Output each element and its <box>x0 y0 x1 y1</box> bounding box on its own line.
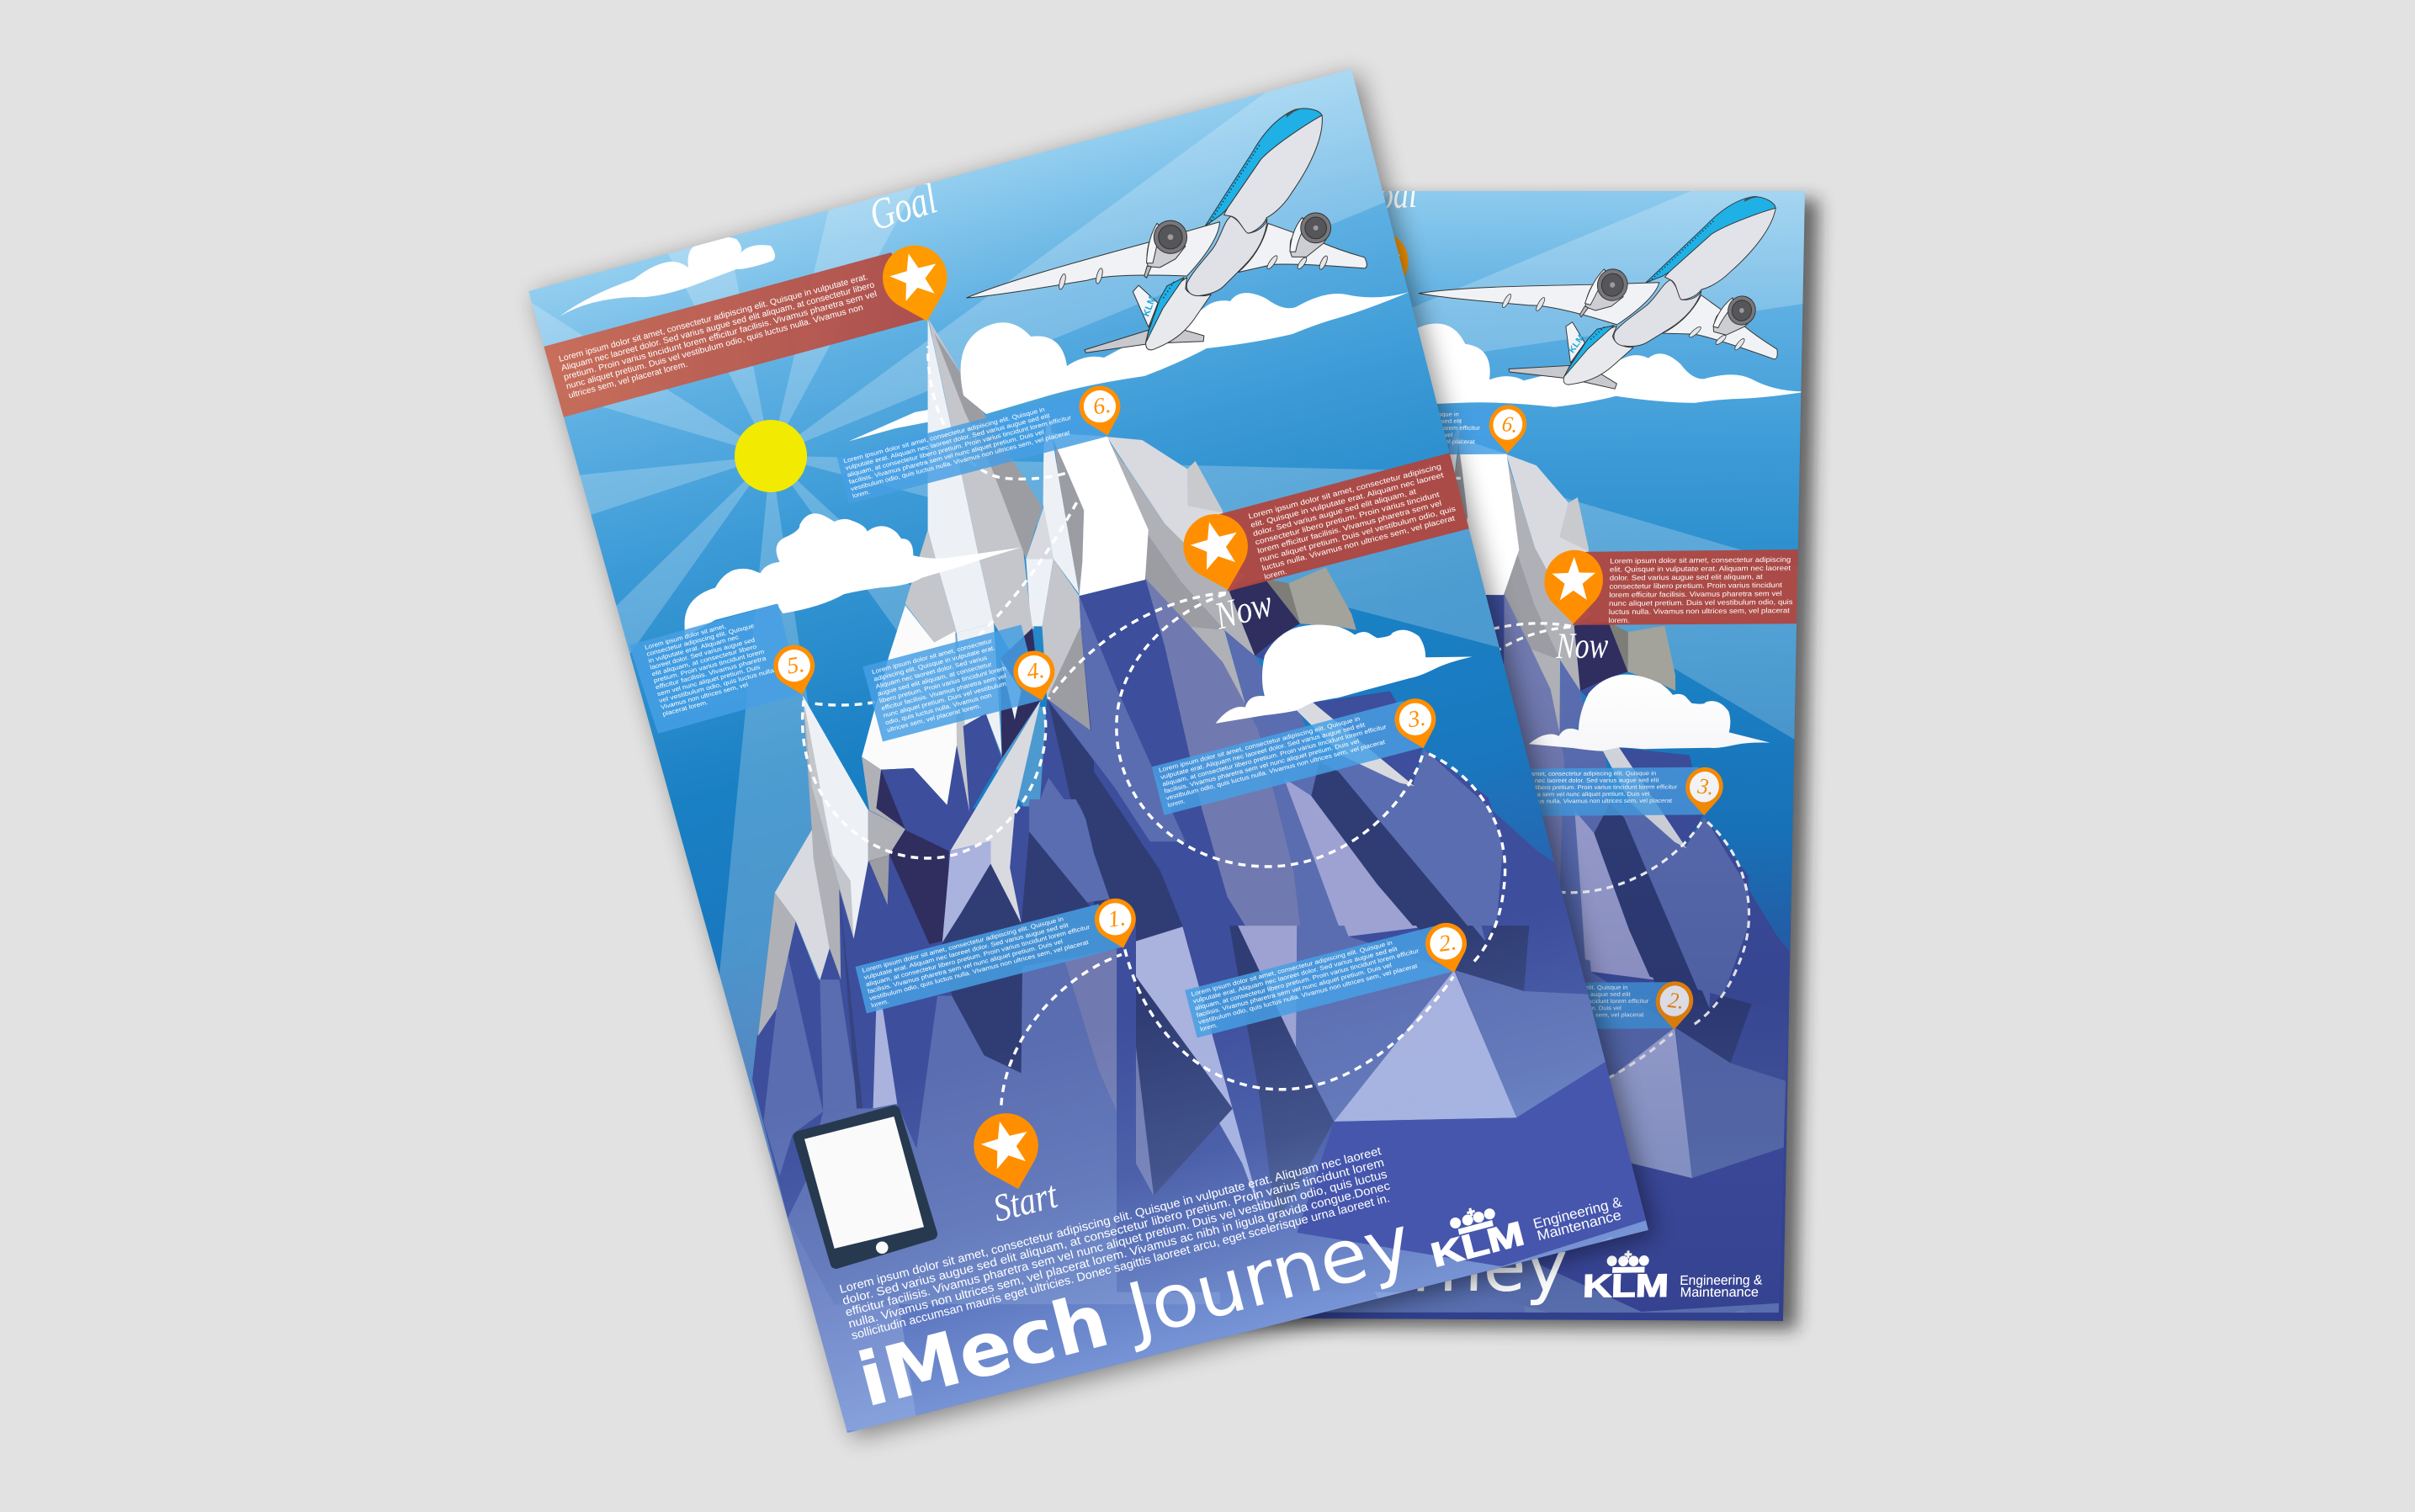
text panel four: efficitur facilisis. Vivamus pharetra sem vel <box>880 671 1007 712</box>
pin: five: 5. <box>785 650 806 679</box>
pin: four: 4. <box>1025 656 1046 684</box>
text panel two: vestibulum odio, quis luctus nulla. Vivamus non ultrices sem, vel placerat <box>1197 962 1418 1026</box>
central massif under Now <box>1094 437 1538 926</box>
plane <box>967 109 1367 353</box>
plane blue top <box>1206 109 1322 225</box>
text panel four: odio, quis luctus nulla. Vivamus non <box>884 692 992 726</box>
text panel two: lorem. <box>1199 1021 1218 1033</box>
bottom right blue facet <box>1297 1060 1648 1266</box>
text panel two: Lorem ipsum dolor sit amet, consectetur adipiscing elit. Quisque in <box>1190 938 1393 998</box>
text panel four: Aliquam nec laoreet dolor. Sed varius <box>875 654 988 690</box>
text panel five: efficitur facilisis. Vivamus pharetra <box>655 654 768 691</box>
text panel two: aliquam, at consectetur libero pretium. Proin varius tincidunt lorem efficitur <box>1194 947 1420 1012</box>
route: dashed journey paths <box>803 346 1505 1106</box>
pin: six <box>1079 386 1120 435</box>
plane windows <box>1208 146 1260 225</box>
goal text panel <box>544 252 926 417</box>
front poster <box>522 67 1778 1433</box>
lower right massif <box>1117 841 1641 1292</box>
plane right engine <box>1290 213 1331 257</box>
logo division name: Engineering & <box>1531 1194 1623 1232</box>
text panel four: nunc aliquet pretium. Duis vel vestibulum <box>883 680 1007 719</box>
peak: five <box>803 696 868 939</box>
cloud: top left <box>560 236 775 316</box>
plane cockpit <box>1287 109 1302 118</box>
mountain base <box>1040 592 1190 804</box>
pin: two: 2. <box>1437 928 1458 957</box>
text panel two <box>1185 926 1454 1037</box>
goal text panel: nunc aliquet pretium. Duis vel vestibulum odio, quis luctus nulla. Vivamus non <box>565 303 864 391</box>
text panel five: sem vel nunc aliquet pretium. Duis <box>656 663 762 698</box>
body text: Lorem ipsum dolor sit amet, consectetur adipiscing elit. Quisque in vulputate erat. Aliquam nec laoreet <box>838 1143 1383 1296</box>
text panel one <box>855 904 1123 1013</box>
plane right wing <box>1238 223 1367 273</box>
text panel five: Vivamus non ultrices sem, vel <box>660 681 749 711</box>
now text panel: elit. Quisque in vulputate erat. Aliquam nec laoreet <box>1250 470 1445 529</box>
pin: five <box>773 645 815 695</box>
now text panel: luctus nulla. Vivamus non ultrices sem, vel placerat <box>1261 513 1457 572</box>
text panel one: lorem. <box>870 997 889 1009</box>
lower left massif <box>752 799 1220 1304</box>
body text: sollicitudin accumsan mauris eget ultricies. Donec sagittis laoreet arcu, eget scelerisque urna laoreet in. <box>850 1191 1391 1342</box>
peak: goal spire <box>928 319 994 633</box>
plane tail logo: KLM <box>1141 295 1158 318</box>
text panel five: in vulputate erat. Aliquam nec <box>647 633 740 665</box>
text panel one: vulputate erat. Aliquam nec laoreet dolor. Sed varius augue sed elit <box>863 921 1070 981</box>
plane flap fairings <box>1058 254 1329 290</box>
text panel three: aliquam, at consectetur libero pretium. Proin varius tincidunt lorem efficitur <box>1161 723 1388 788</box>
text panel three: facilisis. Vivamus pharetra sem vel nunc aliquet pretium. Duis vel <box>1163 737 1361 795</box>
text panel five: pretium. Proin varius tincidunt lorem <box>653 648 765 684</box>
text panel four: libero pretium. Proin varius tincidunt lorem <box>878 664 1007 705</box>
text panel one: aliquam, at consectetur libero pretium. Proin varius tincidunt lorem efficitur <box>865 923 1091 988</box>
plane left wing <box>967 222 1219 298</box>
body text: dolor. Sed varius augue sed elit aliquam, at consectetur libero pretium. Proin varius tincidunt lorem <box>841 1155 1385 1308</box>
text panel five: consectetur adipiscing elit. Quisque <box>645 622 755 658</box>
text panel one: Lorem ipsum dolor sit amet, consectetur adipiscing elit. Quisque in <box>862 915 1064 974</box>
body text: efficitur facilisis. Vivamus pharetra sem vel nunc aliquet pretium. Duis vel vestibulum odio, quis luctus <box>844 1167 1388 1318</box>
pin: two <box>1425 923 1467 973</box>
text panel six: facilisis. Vivamus pharetra sem vel nunc aliquet pretium. Duis vel <box>848 428 1045 485</box>
peak: six <box>1026 507 1054 559</box>
back poster <box>1299 191 1805 1321</box>
now text panel: dolor. Sed varius augue sed elit aliquam, at <box>1252 487 1418 538</box>
front poster shadow <box>535 74 1655 1438</box>
text panel five: placerat lorem. <box>661 698 709 718</box>
now text panel: lorem efficitur facilisis. Vivamus pharetra sem vel <box>1256 499 1442 555</box>
label: Goal: Goal <box>864 175 942 240</box>
bottom light fade <box>528 69 1648 1433</box>
label: Start: Start <box>989 1173 1062 1230</box>
text panel one: vestibulum odio, quis luctus nulla. Vivamus non ultrices sem, vel placerat <box>868 938 1089 1002</box>
logo wordmark: KLM <box>1427 1215 1528 1275</box>
pin: three <box>1394 698 1436 748</box>
plane left engine <box>1144 220 1187 278</box>
goal text panel: Aliquam nec laoreet dolor. Sed varius augue sed elit aliquam, at consectetur libero <box>560 280 876 374</box>
text panel four: augue sed elit aliquam, at consectetur <box>877 660 993 698</box>
pin: one <box>1095 899 1136 948</box>
cloud: main under plane <box>961 292 1409 414</box>
title: iMech Journey <box>849 1198 1420 1424</box>
snow peaks <box>758 319 1186 1036</box>
now text panel: consectetur libero pretium. Proin varius tincidunt <box>1255 490 1441 546</box>
text panel five: elit aliquam, at consectetur libero <box>651 643 757 678</box>
pin: now star <box>1183 514 1248 590</box>
label: Now: Now <box>1210 581 1277 638</box>
text panel five <box>629 604 800 734</box>
now text panel: nunc aliquet pretium. Duis vel vestibulum odio, quis <box>1259 504 1457 564</box>
text panel six: aliquam, at consectetur libero pretium. Proin varius tincidunt lorem efficitur <box>847 413 1073 479</box>
text panel six: vestibulum odio, quis luctus nulla. Vivamus non ultrices sem, vel placerat <box>850 429 1070 493</box>
pin: one: 1. <box>1107 904 1127 932</box>
sun rays <box>522 67 1778 1430</box>
cloud: at Now <box>1216 624 1473 724</box>
plane rear fuselage <box>1146 278 1211 350</box>
mountains <box>752 319 1641 1304</box>
text panel four: ultrices sem, vel placerat lorem. <box>886 702 981 734</box>
back poster shadow <box>994 199 1818 1329</box>
text panel three: vulputate erat. Aliquam nec laoreet dolor. Sed varius augue sed elit <box>1160 721 1366 781</box>
text panel four: adipiscing elit. Quisque in vulputate erat. <box>873 644 996 683</box>
cloud: middle left <box>685 513 1022 638</box>
text panel four <box>862 625 1041 741</box>
plane centre section <box>1186 216 1267 296</box>
pin: six: 6. <box>1091 391 1112 419</box>
text panel five: Lorem ipsum dolor sit amet, <box>644 622 727 651</box>
sky gradient <box>528 69 1648 1433</box>
tablet icon <box>799 1111 932 1263</box>
text panel two: vulputate erat. Aliquam nec laoreet dolor. Sed varius augue sed elit <box>1192 945 1399 1005</box>
text panel three: vestibulum odio, quis luctus nulla. Vivamus non ultrices sem, vel placerat <box>1165 738 1386 802</box>
text panel six: lorem. <box>852 488 871 500</box>
text panel six <box>837 391 1107 504</box>
pin: four <box>1013 651 1054 700</box>
text panel two: facilisis. Vivamus pharetra sem vel nunc aliquet pretium. Duis vel <box>1196 961 1393 1019</box>
text panel three: lorem. <box>1167 797 1186 809</box>
text panel four: Lorem ipsum dolor sit amet, consectetur <box>871 637 993 676</box>
text panel three <box>1152 701 1422 815</box>
now text panel: lorem. <box>1263 567 1287 581</box>
plane tail fin <box>1133 285 1158 327</box>
body text: nulla. Vivamus non ultrices sem, vel placerat lorem. Vivamus ac nibh in ligula gravida congue.Donec <box>847 1179 1391 1330</box>
text panel three: Lorem ipsum dolor sit amet, consectetur adipiscing elit. Quisque in <box>1158 714 1361 774</box>
text panel six: Lorem ipsum dolor sit amet, consectetur adipiscing elit. Quisque in <box>842 406 1046 464</box>
peak: four <box>950 700 1041 923</box>
sun <box>735 420 807 492</box>
text panel six: vulputate erat. Aliquam nec laoreet dolor. Sed varius augue sed elit <box>844 411 1050 472</box>
now text panel: Lorem ipsum dolor sit amet, consectetur adipiscing <box>1247 462 1442 521</box>
logo crown <box>1450 1208 1495 1235</box>
goal text panel: Lorem ipsum dolor sit amet, consectetur adipiscing elit. Quisque in vulputate erat. <box>558 273 869 364</box>
plane tailplanes <box>1085 330 1149 353</box>
logo: KLM <box>1427 1194 1623 1275</box>
text panel five: laoreet dolor. Sed varius augue sed <box>650 636 756 671</box>
now text panel <box>1219 453 1469 592</box>
plane front fuselage <box>1223 115 1322 233</box>
goal text panel: ultrices sem, vel placerat lorem. <box>568 360 688 401</box>
pin: three: 3. <box>1405 704 1427 732</box>
text panel one: facilisis. Vivamus pharetra sem vel nunc aliquet pretium. Duis vel <box>867 937 1064 995</box>
goal text panel: pretium. Proin varius tincidunt lorem efficitur facilisis. Vivamus pharetra sem vel <box>563 289 878 383</box>
cloud: tip behind peak <box>849 410 928 441</box>
pin: goal star <box>883 246 947 321</box>
logo: KLM: Maintenance <box>1536 1207 1623 1244</box>
pin: start star <box>974 1113 1038 1189</box>
text panel five: vel vestibulum odio, quis luctus nulla. <box>658 666 777 704</box>
